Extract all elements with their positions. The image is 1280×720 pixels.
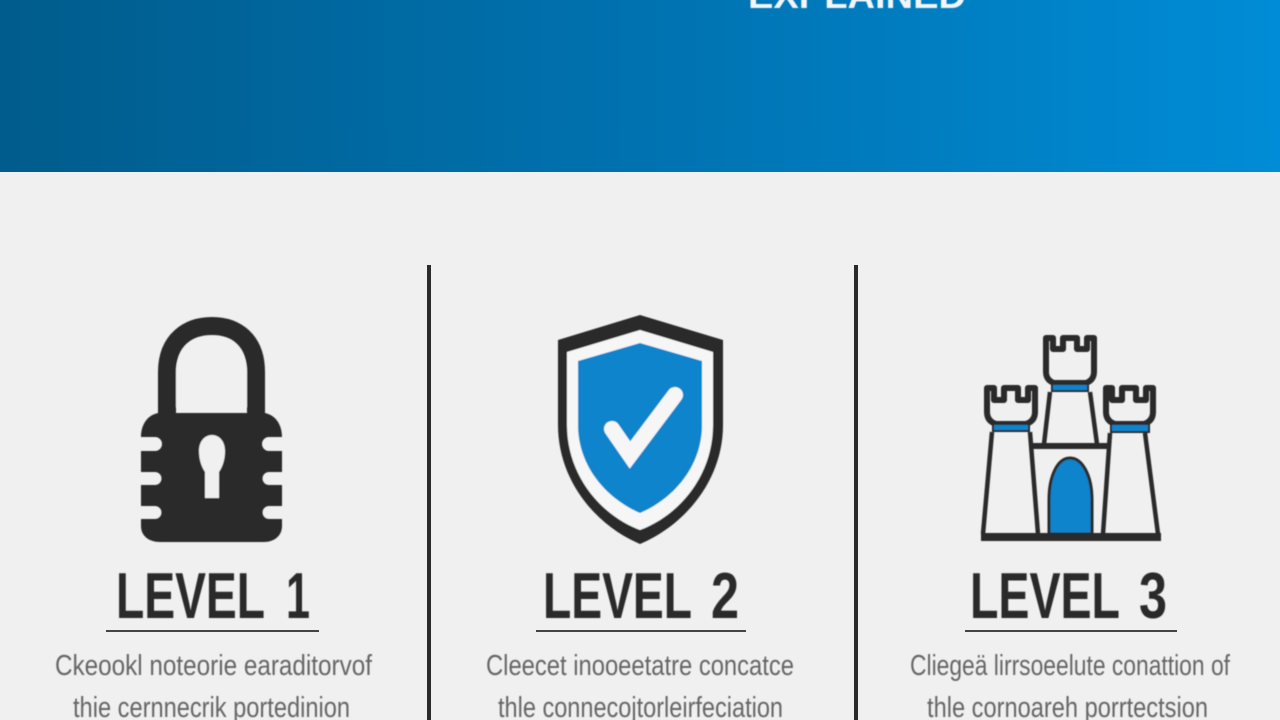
gate door [1049,458,1092,534]
icon: shield with check [558,315,723,544]
icon: castle [981,338,1161,541]
heading: level 2: 2 [711,559,739,632]
heading: level 1: LEVEL [116,559,265,632]
heading: level 3: 3 [1139,559,1167,632]
description: level 2: Cleecet inooeetatre concatce [486,650,794,682]
divider left [427,265,431,720]
header banner [0,0,1280,172]
heading: level 3: LEVEL [970,559,1120,632]
left tower [983,388,1038,534]
description: level 1: Ckeookl noteorie earaditorvof [55,650,373,682]
heading underline [965,630,1177,632]
description: level 1 [55,650,373,720]
icon: padlock [141,326,282,542]
panel: level 1 [55,326,373,720]
center tower [1044,338,1097,444]
gate wall [1032,443,1108,449]
heading: level 1: 1 [286,559,310,632]
divider right [854,265,858,720]
panel: level 3 [910,338,1231,720]
right tower [1103,388,1158,534]
panel: level 2 [486,315,794,720]
description: level 2 [486,650,794,720]
heading underline [536,630,746,632]
heading underline [106,630,319,632]
castle base [981,533,1161,541]
description: level 3 [910,650,1231,720]
heading: level 2: LEVEL [543,559,692,632]
